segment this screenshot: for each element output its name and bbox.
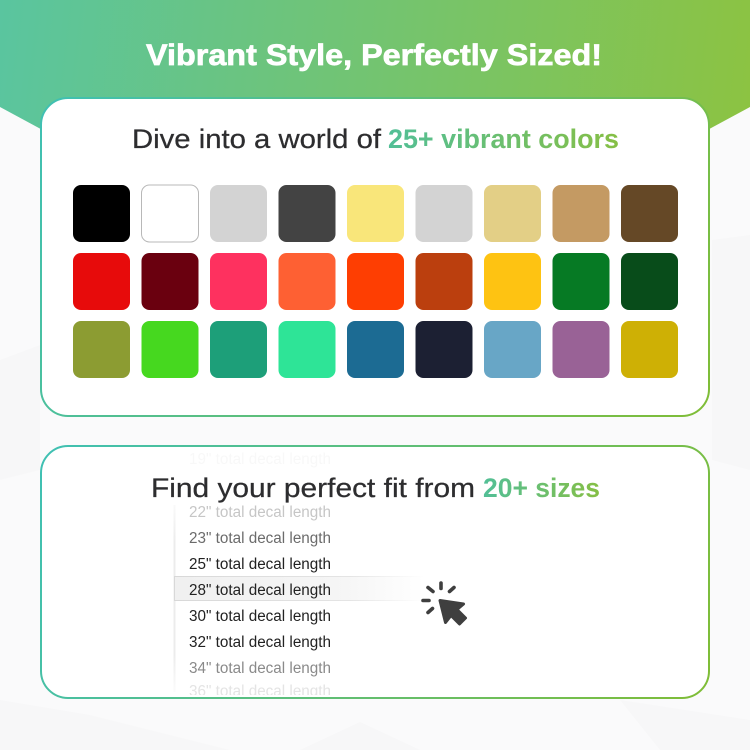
icon: click cursor [423, 583, 466, 624]
size dropdown list: 25" total decal length [189, 556, 331, 573]
panel background: sizes [41, 446, 709, 698]
size dropdown list: 30" total decal length [189, 608, 331, 625]
heading: colors: Dive into a world of [132, 124, 382, 154]
size dropdown list: 23" total decal length [189, 530, 331, 547]
size dropdown list: 32" total decal length [189, 634, 331, 651]
size dropdown list: 36" total decal length [189, 683, 331, 700]
size dropdown list: 28" total decal length [189, 582, 331, 599]
panel background: colors [41, 98, 709, 416]
size dropdown list: 22" total decal length [189, 504, 331, 521]
size dropdown list: 34" total decal length [189, 660, 331, 677]
heading: sizes: 20+ sizes [483, 473, 600, 503]
size dropdown list [174, 506, 402, 695]
faint cut-off list row: 19" total decal length [189, 451, 331, 468]
header banner [0, 0, 750, 134]
highlighted row [174, 576, 424, 601]
background texture [0, 235, 750, 750]
panel: sizes [41, 446, 709, 700]
title: Vibrant Style, Perfectly Sized! [146, 39, 602, 72]
heading: sizes: Find your perfect fit from [151, 473, 475, 503]
heading: colors: 25+ vibrant colors [388, 124, 619, 154]
panel: colors [41, 98, 709, 416]
color swatches [73, 185, 678, 378]
